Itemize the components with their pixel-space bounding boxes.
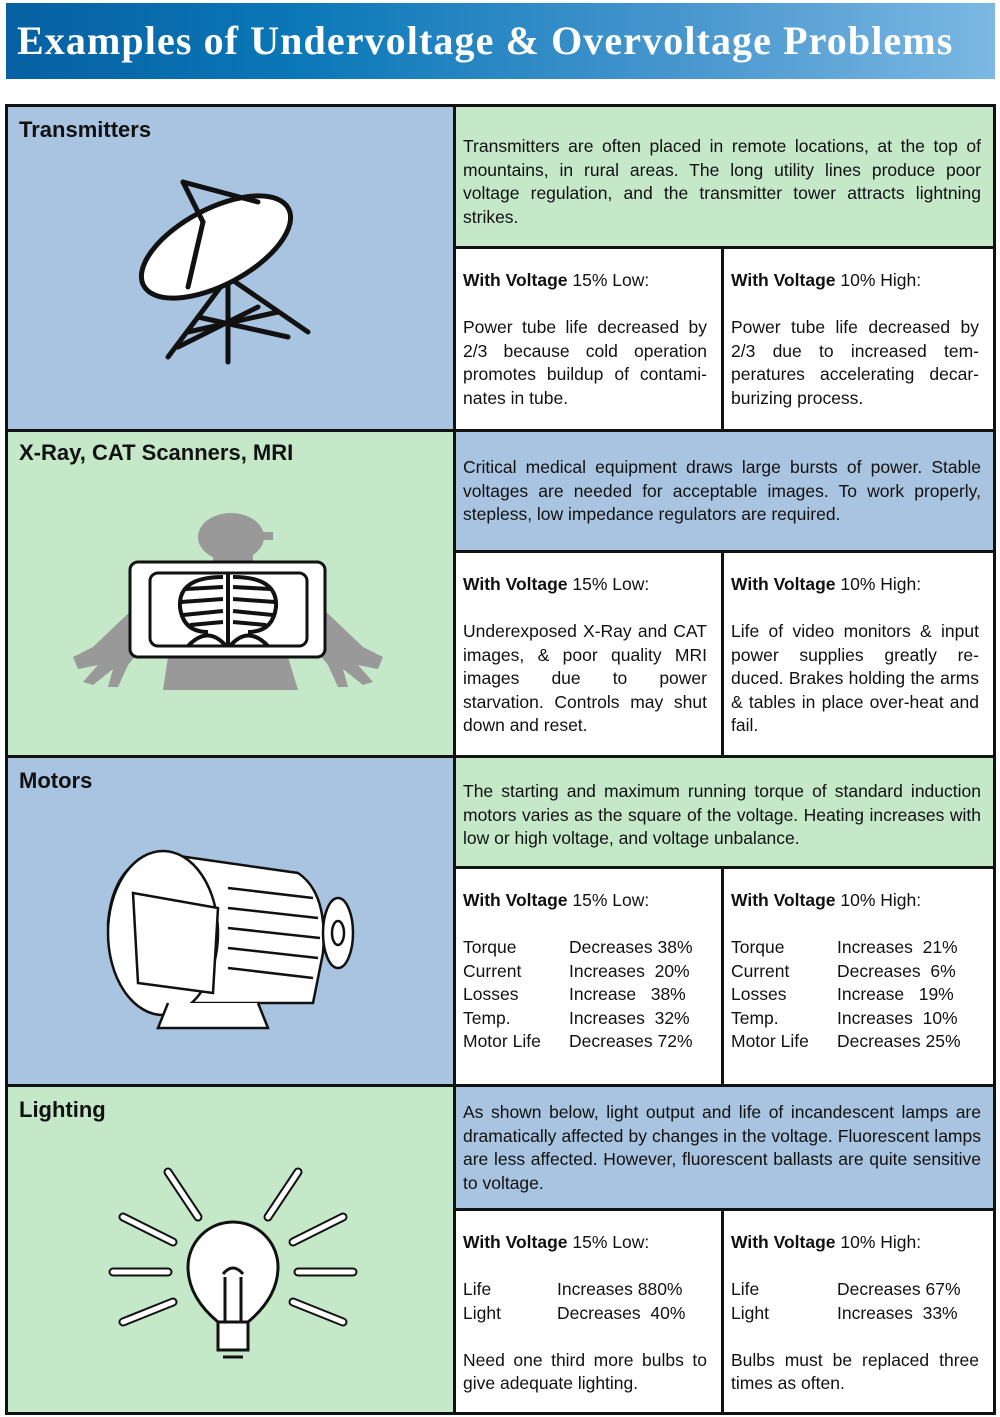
panel: motors high: Increases 21% [837,937,958,957]
panel: x-ray label [8,432,453,755]
panel: transmitters high: Power tube life decreased by 2/3 due to increased tem-peratures accelerating decar-burizing process. [731,317,979,408]
panel: transmitters description: Transmitters are often placed in remote locations, at the top of mountains, in rural areas. The long utility lines produce poor voltage regulation, and the transmitter tower attracts lightning strikes. [463,136,981,226]
panel: x-ray description [456,432,993,550]
panel: lighting high: Light [731,1302,769,1322]
panel: lighting low [456,1211,721,1412]
panel: x-ray low [456,553,721,755]
panel: motors label [8,758,453,1084]
panel: lighting low: Increases 880% [557,1279,682,1299]
panel: transmitters low: With Voltage 15% Low: [463,270,649,290]
panel: motors high: Increases 10% [837,1008,958,1028]
panel: motors high: Motor Life [731,1031,809,1051]
panel: motors low: Torque [463,937,517,957]
heading: lighting: Lighting [19,1097,106,1122]
panel: motors high: Decreases 25% [837,1031,961,1051]
panel: motors low: Motor Life [463,1031,541,1051]
panel: transmitters high: With Voltage 10% High: [731,270,921,290]
panel: lighting high: Increases 33% [837,1302,958,1322]
panel: motors low: Current [463,960,521,980]
panel: motors low: With Voltage 15% Low: [463,890,649,910]
panel: lighting description: As shown below, light output and life of incandescent lamps are dramatically affected by changes in the voltage. Fluorescent lamps are less affected. However, fluorescent ballasts are quite sensitive to voltage. [463,1102,981,1192]
icon: satellite dish [138,180,310,364]
panel: transmitters label [8,107,453,429]
panel: lighting high: Life [731,1279,759,1299]
panel: transmitters high [724,249,993,429]
panel: x-ray low: With Voltage 15% Low: [463,574,649,594]
panel: lighting high: With Voltage 10% High: [731,1232,921,1252]
panel: motors high [724,869,993,1084]
panel: motors high: Increase 19% [837,984,954,1004]
panel: lighting label [8,1087,453,1412]
panel: motors high: Current [731,960,789,980]
panel: motors high: Torque [731,937,785,957]
panel: motors low: Increases 32% [569,1008,690,1028]
panel: lighting low: With Voltage 15% Low: [463,1232,649,1252]
icon: motor [106,850,354,1030]
panel: motors low: Increases 20% [569,960,690,980]
title [6,3,995,79]
panel: motors description [456,758,993,866]
panel: lighting low: Light [463,1302,501,1322]
panel: transmitters low [456,249,721,429]
panel: x-ray low: Underexposed X-Ray and CAT images, & poor quality MRI images due to power starvation. Controls may shut down and reset. [463,621,707,735]
panel: lighting high: Decreases 67% [837,1279,961,1299]
panel: transmitters description [456,107,993,246]
panel: x-ray high: With Voltage 10% High: [731,574,921,594]
panel: transmitters low: Power tube life decreased by 2/3 because cold operation promotes buildup of contami-nates in tube. [463,317,707,408]
panel: motors low [456,869,721,1084]
panel: motors low: Losses [463,984,518,1004]
icon: x-ray person [73,513,383,690]
panel: x-ray description: Critical medical equipment draws large bursts of power. Stable voltages are needed for acceptable images. To work properly, stepless, low impedance regulators are required. [463,457,981,524]
panel: motors description: The starting and maximum running torque of standard induction motors varies as the square of the voltage. Heating increases with low or high voltage, and voltage unbalance. [463,781,981,848]
heading: x-ray: X-Ray, CAT Scanners, MRI [19,440,293,465]
panel: motors high: Losses [731,984,786,1004]
panel: lighting low: Life [463,1279,491,1299]
panel: lighting high: Bulbs must be replaced three times as often. [731,1350,979,1393]
icon: light bulb [108,1168,358,1358]
panel: motors low: Temp. [463,1008,511,1028]
panel: motors low: Increase 38% [569,984,686,1004]
panel: x-ray high [724,553,993,755]
panel: lighting high [724,1211,993,1412]
panel: x-ray high: Life of video monitors & input power supplies greatly re-duced. Brakes holding the arms & tables in place over-heat and fail. [731,621,979,735]
panel: motors high: Temp. [731,1008,779,1028]
heading: transmitters: Transmitters [19,117,151,142]
panel: motors high: Decreases 6% [837,960,956,980]
panel: motors low: Decreases 38% [569,937,693,957]
panel: lighting low: Need one third more bulbs to give adequate lighting. [463,1350,707,1393]
panel: motors low: Decreases 72% [569,1031,693,1051]
panel: lighting low: Decreases 40% [557,1302,685,1322]
heading: motors: Motors [19,768,92,793]
title: Examples of Undervoltage & Overvoltage Problems [17,18,953,63]
panel: motors high: With Voltage 10% High: [731,890,921,910]
